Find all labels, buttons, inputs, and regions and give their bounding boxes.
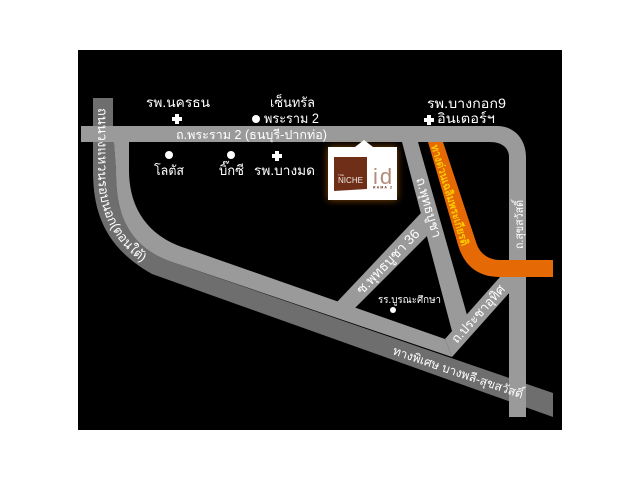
icon: Lotus dot [165, 151, 173, 159]
logo id mark: id [373, 164, 394, 189]
label: Inter: อินเตอร์ฯ [437, 110, 495, 126]
logo small text: RAMA 2 [373, 186, 392, 190]
label: Suksawat road: ถ.สุขสวัสดิ์ [510, 198, 526, 249]
logo small word: THE [338, 173, 344, 177]
logo card [328, 140, 397, 200]
icon: hospital cross [172, 114, 182, 124]
road: Pracha Uthit [445, 277, 510, 357]
road: ring road light band [113, 130, 452, 357]
label: Central Rama 2: พระราม 2 [264, 111, 319, 126]
label: Rama 2 road: ถ.พระราม 2 (ธนบุรี-ปากท่อ) [176, 128, 327, 143]
icon: Central dot [252, 115, 260, 123]
road: outer ring dark band and expressway [93, 98, 553, 417]
road: Soi Phutthabucha 36 [337, 213, 428, 308]
label: special expressway: ทางพิเศษ บางพลี-สุขสวัสดิ์ [391, 342, 527, 403]
label: Big C: บิ๊กซี [219, 160, 244, 178]
label: Pracha Uthit road: ถ.ประชาอุทิศ [448, 281, 509, 347]
logo callout [328, 140, 397, 200]
road: right road and Rama 2 [81, 126, 526, 417]
label: Soi Phutthabucha 36: ซ.พุทธบูชา 36 [353, 226, 423, 298]
icon: Big C dot [227, 151, 235, 159]
road: Phutthabucha [402, 142, 467, 335]
label: Phutthabucha road: ถ.พุทธบูชา [412, 176, 445, 240]
logo brown panel [334, 157, 367, 191]
road: orange expressway [428, 142, 553, 277]
icon: hospital cross [272, 151, 282, 161]
logo glow [328, 147, 397, 200]
label: Lotus: โลตัส [154, 162, 184, 178]
label: Nakornthon hospital: รพ.นครธน [146, 95, 210, 110]
logo name: NICHE [338, 175, 363, 185]
label: outer ring road: ถนนวงแหวนรอบนอก(ตอนใต้) [98, 108, 146, 263]
label: Purana Suksa school: รร.บูรณะศึกษา [378, 294, 441, 306]
label: Bangkok 9 hospital: รพ.บางกอก9 [427, 96, 506, 111]
label: Bangmod hospital: รพ.บางมด [254, 163, 315, 178]
label: expressway: ทางด่วนเฉลิมพระเกียรติ [428, 143, 471, 247]
label: Central: เซ็นทรัล [270, 93, 315, 110]
map background [78, 50, 562, 430]
icon: school dot [390, 307, 396, 313]
icon: hospital cross [424, 115, 434, 125]
